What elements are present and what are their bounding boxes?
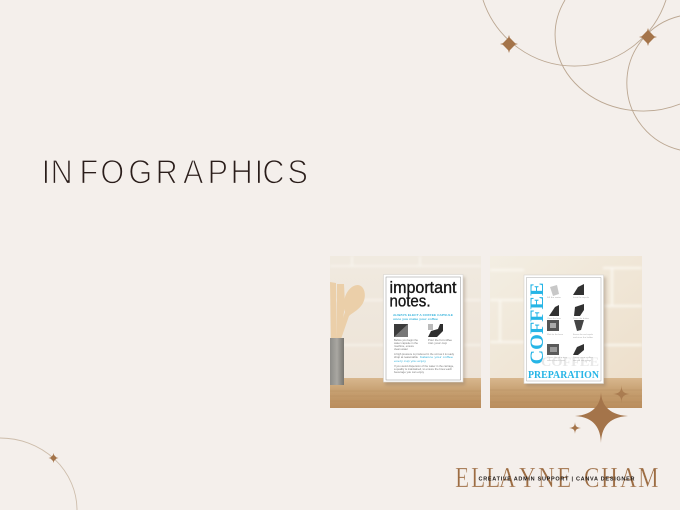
icon: small sparkle bottom	[569, 422, 581, 434]
brand tagline: CREATIVE ADMIN SUPPORT | CANVA DESIGNER	[478, 476, 635, 482]
poster step captions: Serve your coffee	[573, 356, 594, 359]
poster body text: A high pressure is produced in the unit as it is ready	[394, 353, 455, 356]
white poster frame	[524, 275, 604, 384]
poster body text: into your cup	[428, 342, 448, 345]
photo wall	[330, 256, 481, 380]
poster body text: clean water	[394, 348, 408, 351]
poster step captions	[547, 296, 594, 362]
poster step captions: and rinse the holder	[573, 336, 593, 339]
poster body text: shop at reasonable	[394, 356, 419, 359]
wooden shelf	[330, 378, 481, 408]
poster body text: water capsule in the	[394, 342, 419, 345]
poster body text: Pour the hot coffee	[428, 339, 453, 342]
poster step captions: Close the lever	[547, 317, 561, 320]
icon: sparkle top right	[639, 28, 657, 46]
title: INFOGRAPHICS	[42, 153, 308, 191]
poster heading: notes.	[390, 292, 430, 310]
photo wall	[490, 256, 642, 380]
icon: small sparkle on shelf	[613, 385, 630, 403]
poster body text: balance your coffee	[420, 356, 454, 359]
wall bricks	[490, 268, 642, 345]
frame shadow	[526, 277, 606, 386]
poster body text: a quality is maintained, to ensure the brew each	[394, 368, 453, 371]
panel: left photo mockup	[330, 256, 481, 408]
poster step captions: Fill the water	[547, 296, 561, 299]
poster body text: machine, ensure	[394, 345, 415, 348]
poster body text: Before you begin the	[394, 339, 419, 342]
poster blue subheading	[393, 314, 453, 320]
poster ghost text: COFFEE	[541, 354, 599, 369]
wooden spoons	[330, 282, 365, 340]
poster step captions: Insert the capsule	[573, 296, 590, 299]
panel: right photo mockup	[490, 256, 642, 408]
poster step captions: Wait for the brew	[547, 333, 563, 336]
poster step images	[547, 284, 584, 355]
wall bricks	[344, 264, 480, 346]
poster step captions: and enjoy	[573, 360, 593, 362]
poster step captions: Remove the used capsule	[573, 333, 594, 336]
poster coffee images	[394, 324, 443, 337]
poster body text: If you avoid dispersion of the water in the carriage,	[394, 365, 454, 368]
frame shadow	[385, 277, 465, 385]
decorative arcs top right	[483, 0, 680, 150]
poster body text	[394, 339, 455, 374]
poster step captions: after each use	[547, 359, 566, 362]
shelf grain	[490, 390, 642, 391]
icon: sparkle bottom left	[48, 453, 58, 463]
poster blue footer heading: PREPARATION	[528, 369, 599, 381]
wooden shelf	[490, 378, 642, 408]
poster blue subheading: ALWAYS ELECT A COFFEE CAPSULE	[393, 313, 453, 317]
poster heading	[390, 280, 456, 307]
decorative arc bottom left	[0, 438, 77, 510]
poster heading: important	[390, 278, 457, 297]
white poster frame	[384, 274, 463, 382]
icon: sparkle top left	[500, 35, 518, 53]
brand name: ELLAYNE CHAM	[455, 462, 659, 494]
poster blue subheading: once you make your coffee	[393, 317, 438, 321]
poster step captions: Clean the drip tray	[547, 356, 568, 359]
shelf grain	[330, 390, 481, 392]
poster body text: beverage you can enjoy	[394, 371, 425, 374]
icon: large sparkle	[575, 392, 628, 443]
metal utensil can	[330, 338, 344, 385]
poster body text: every cup you enjoy	[394, 360, 427, 363]
poster vertical heading: COFFEE	[527, 282, 548, 364]
poster step captions: Press the button	[573, 317, 590, 320]
